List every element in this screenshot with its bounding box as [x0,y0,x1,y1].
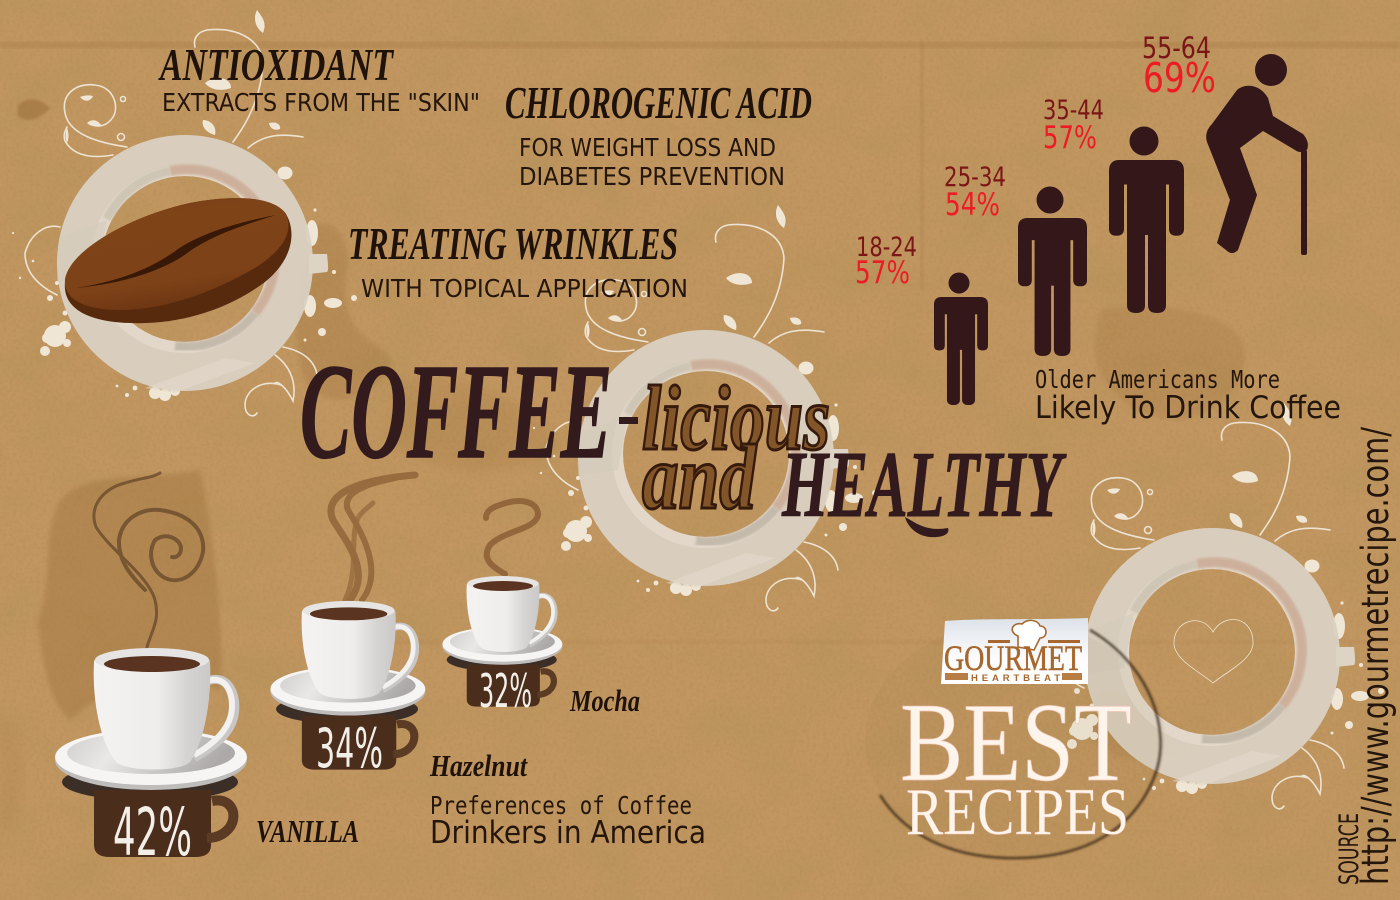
label: mocha: Mocha [569,683,640,718]
text: source: SOURCE [1334,813,1365,885]
badge: best recipes: BEST [900,681,1132,805]
steam: mocha cup [486,501,538,574]
value: 34%: 34% [316,717,383,780]
label: hazelnut: Hazelnut [429,748,528,783]
value: 32%: 32% [479,664,532,718]
text: older americans: Older Americans More [1035,365,1280,394]
age 18-24 label: 57% [855,255,910,291]
age 25-34 label: 54% [945,187,1000,223]
text: older americans: Likely To Drink Coffee [1035,390,1341,426]
title: HEALTHY [781,433,1067,537]
cup: mocha [442,576,562,707]
age 35-44 label: 35-44 [1043,95,1104,126]
title [300,337,1067,537]
top-down cup ring with flourish: heart [1039,403,1384,809]
icon: elderly person with cane [1206,54,1308,255]
top-down cup ring with flourish: bean [12,10,357,416]
text: chlorogenic acid: CHLOROGENIC ACID [505,77,812,128]
age 35-44 label [1043,95,1104,156]
text: chlorogenic acid [505,77,812,191]
age 25-34 label [944,162,1006,223]
text: treating wrinkles: WITH TOPICAL APPLICATION [361,274,688,303]
title: COFFEE [300,337,612,487]
logo: gourmet heartbeat: GOURMET [944,638,1082,678]
icon: middle-aged person [1109,126,1184,313]
text: chlorogenic acid: DIABETES PREVENTION [519,162,785,191]
logo: gourmet heartbeat [941,618,1088,684]
text: preferences [430,791,706,851]
text: preferences: Preferences of Coffee [430,791,692,820]
title: licious [642,367,830,469]
age 55-64 label: 69% [1143,54,1216,102]
value: 42%: 42% [113,794,192,871]
top-down cup ring with flourish: centre [533,205,878,611]
icon: adult person [1018,186,1087,356]
age 18-24 label [855,232,917,291]
text: antioxidant: ANTIOXIDANT [158,39,394,90]
icon: young person [934,272,988,405]
icon: heart outline [1174,620,1253,683]
cup: vanilla [55,648,247,857]
text: source url: http://www.gourmetrecipe.com/ [1354,427,1397,885]
title: and [642,426,758,528]
text: treating wrinkles: TREATING WRINKLES [348,218,678,269]
steam: vanilla cup [94,473,203,647]
steam: hazelnut cup [331,475,415,600]
badge: best recipes [865,622,1165,858]
cup: hazelnut [270,601,425,770]
text: antioxidant [158,39,480,117]
text: preferences: Drinkers in America [430,815,706,851]
age 25-34 label: 25-34 [944,162,1006,193]
label: vanilla: VANILLA [256,813,359,849]
badge: best recipes: RECIPES [906,775,1129,849]
age 55-64 label: 55-64 [1142,31,1211,65]
text: older americans [1035,365,1341,426]
text: treating wrinkles [348,218,688,303]
age 55-64 label [1142,31,1216,102]
text: chlorogenic acid: FOR WEIGHT LOSS AND [519,133,776,162]
logo: gourmet heartbeat: HEARTBEAT [971,673,1060,684]
age 18-24 label: 18-24 [856,232,917,263]
icon: coffee bean [65,198,291,323]
age 35-44 label: 57% [1043,120,1097,156]
text: antioxidant: EXTRACTS FROM THE "SKIN" [162,88,480,117]
